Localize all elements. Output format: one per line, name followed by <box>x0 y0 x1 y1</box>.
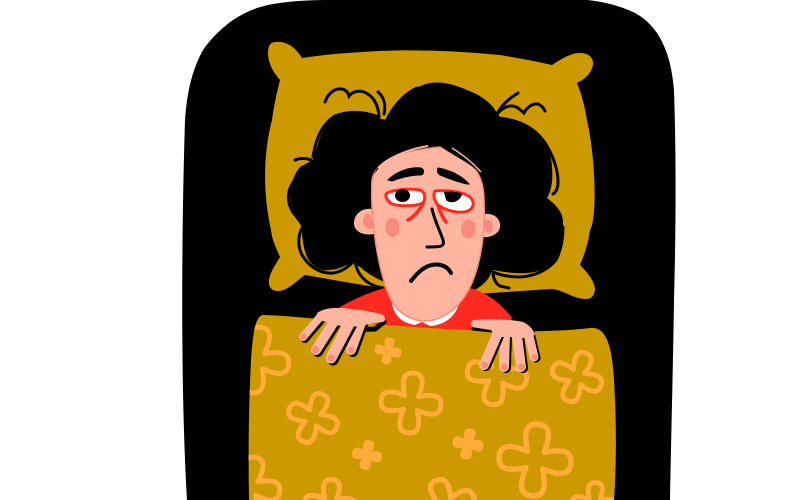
face shape <box>372 147 484 321</box>
eyebrows <box>388 168 424 181</box>
left eye <box>386 189 425 206</box>
left palm <box>317 308 385 327</box>
right ear <box>483 214 500 237</box>
shirt <box>332 288 512 340</box>
blanket <box>215 315 618 500</box>
mouth <box>411 264 451 281</box>
left hand shadow and palm back <box>345 322 384 330</box>
right hand <box>471 319 538 370</box>
bed frame <box>182 0 676 500</box>
cheeks <box>386 218 400 237</box>
left hand nails <box>300 334 354 362</box>
left hand fingers <box>353 322 364 352</box>
blanket flowers <box>248 324 614 500</box>
hair fringe <box>374 135 484 178</box>
right eye <box>434 191 473 212</box>
right hand nails <box>481 354 538 370</box>
hair <box>288 83 563 293</box>
left hand <box>300 308 385 362</box>
left ear <box>354 209 374 234</box>
hair mass <box>290 83 563 292</box>
right palm <box>471 319 535 338</box>
pillow <box>265 42 595 299</box>
right hand fingers <box>530 332 536 358</box>
illustration: exhausted woman lying in bed <box>182 0 676 500</box>
nose <box>427 209 443 247</box>
under-eye bags <box>408 203 446 222</box>
right hand shadow <box>473 329 492 331</box>
hair strands <box>288 88 563 293</box>
collar <box>391 296 460 326</box>
face <box>354 135 500 321</box>
